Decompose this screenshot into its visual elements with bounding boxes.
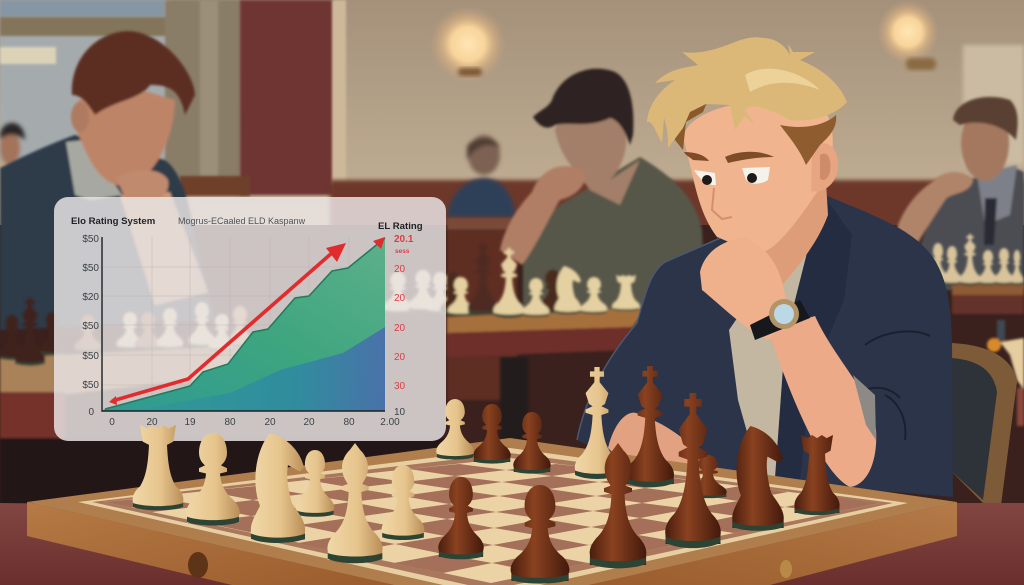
right axis labels: 20.1 — [394, 234, 414, 245]
piece: white rook — [133, 425, 183, 510]
x axis labels: 20 — [146, 417, 158, 428]
board top frame — [27, 438, 957, 585]
right axis title: EL Rating — [378, 221, 423, 232]
right axis labels — [394, 234, 414, 418]
board dark squares — [104, 464, 880, 573]
area: green series — [102, 238, 385, 411]
piece: dark pawn front — [438, 477, 484, 559]
board inlay — [78, 448, 908, 585]
hair — [647, 37, 847, 148]
x axis labels: 2.00 — [380, 417, 400, 428]
chart gridlines — [102, 237, 385, 411]
blurred player: far right — [897, 97, 1024, 290]
left axis labels: $50 — [82, 234, 99, 245]
blurred player: middle — [500, 69, 705, 312]
piece: dark pawn near — [511, 485, 569, 584]
bench behind middle player — [447, 218, 517, 230]
reddish lower wall behind middle table — [447, 230, 517, 400]
board dark border — [92, 453, 893, 585]
piece: white pawn — [296, 450, 334, 517]
panel: Elo chart — [54, 197, 446, 441]
piece: white king — [575, 367, 619, 479]
watch strap — [750, 300, 810, 340]
watch — [769, 299, 799, 329]
piece: white pawn front — [382, 465, 424, 540]
blurred player: left — [0, 31, 215, 330]
x axis labels: 20 — [264, 417, 276, 428]
shirt cuff — [853, 375, 876, 440]
jacket — [577, 193, 953, 497]
chart subtitle: Mogrus-ECaaled ELD Kaspanw — [178, 216, 306, 226]
piece: dark queen — [665, 393, 721, 548]
x axis labels: 0 — [109, 417, 115, 428]
left axis labels: 0 — [88, 407, 94, 418]
board lock left — [188, 552, 208, 578]
arrow: trend — [109, 237, 385, 405]
piece: white pawn back — [436, 399, 474, 460]
area: blue series — [130, 327, 385, 411]
hair sides — [780, 115, 836, 165]
x axis labels: 80 — [224, 417, 236, 428]
x axis labels: 19 — [184, 417, 196, 428]
lower dark room — [0, 225, 1024, 515]
piece: dark knight — [732, 426, 784, 531]
main player — [577, 37, 953, 497]
board light squares — [104, 458, 880, 583]
hair highlight — [745, 69, 820, 92]
right axis labels: sess — [395, 248, 410, 255]
lapel — [775, 193, 852, 480]
left axis labels: $50 — [82, 263, 99, 274]
face — [683, 102, 833, 252]
left axis labels: $50 — [82, 351, 99, 362]
right axis labels: 20 — [394, 323, 406, 334]
piece: white bishop — [186, 433, 240, 525]
chart title: Elo Rating System — [71, 216, 155, 227]
forearm — [768, 316, 876, 487]
left axis labels — [82, 234, 99, 418]
other hand — [608, 413, 720, 484]
piece: dark king — [626, 366, 674, 487]
blurred player: far left head — [0, 123, 25, 165]
board left side — [27, 502, 394, 585]
blurred player: distant — [447, 135, 515, 217]
line: green series — [105, 238, 385, 409]
hair underside — [672, 95, 710, 150]
right eye — [742, 167, 770, 184]
left table with pieces — [0, 298, 450, 513]
nose — [712, 188, 732, 219]
far right table corner with orange piece — [987, 320, 1024, 426]
piece: white bishop front — [327, 443, 383, 563]
axes — [102, 237, 385, 411]
left eye — [694, 170, 716, 185]
right eyebrow — [725, 152, 774, 163]
chair — [950, 343, 1017, 505]
neck — [760, 165, 828, 300]
shirt — [729, 212, 828, 482]
hand on chin — [700, 237, 790, 340]
jacket rim light — [577, 236, 725, 440]
right axis labels: 30 — [394, 381, 406, 392]
wall lamp left — [430, 6, 506, 82]
piece: dark rook — [794, 435, 840, 515]
board lock right — [780, 560, 792, 578]
foreground table — [0, 470, 1024, 585]
chess board — [27, 438, 957, 585]
right axis labels: 20 — [394, 264, 406, 275]
left eyebrow — [684, 152, 709, 161]
board right side — [589, 502, 957, 585]
back pieces behind player arm — [689, 455, 727, 498]
piece: white knight — [251, 433, 305, 543]
piece: dark pawn back b — [513, 412, 551, 474]
wall lamp right — [877, 0, 939, 70]
x axis labels: 20 — [303, 417, 315, 428]
x axis labels — [109, 417, 400, 428]
x axis labels: 80 — [343, 417, 355, 428]
piece: dark pawn back a — [473, 404, 511, 464]
right axis labels: 20 — [394, 352, 406, 363]
left axis labels: $50 — [82, 321, 99, 332]
far right table with pieces — [928, 234, 1024, 314]
right axis labels: 10 — [394, 407, 406, 418]
left axis labels: $50 — [82, 380, 99, 391]
piece: dark bishop — [590, 443, 646, 568]
right axis labels: 20 — [394, 293, 406, 304]
left axis labels: $20 — [82, 292, 99, 303]
background: cafe wall — [0, 0, 1024, 230]
jacket creases — [860, 331, 930, 440]
ear — [811, 143, 838, 191]
middle table with pieces — [383, 243, 647, 447]
